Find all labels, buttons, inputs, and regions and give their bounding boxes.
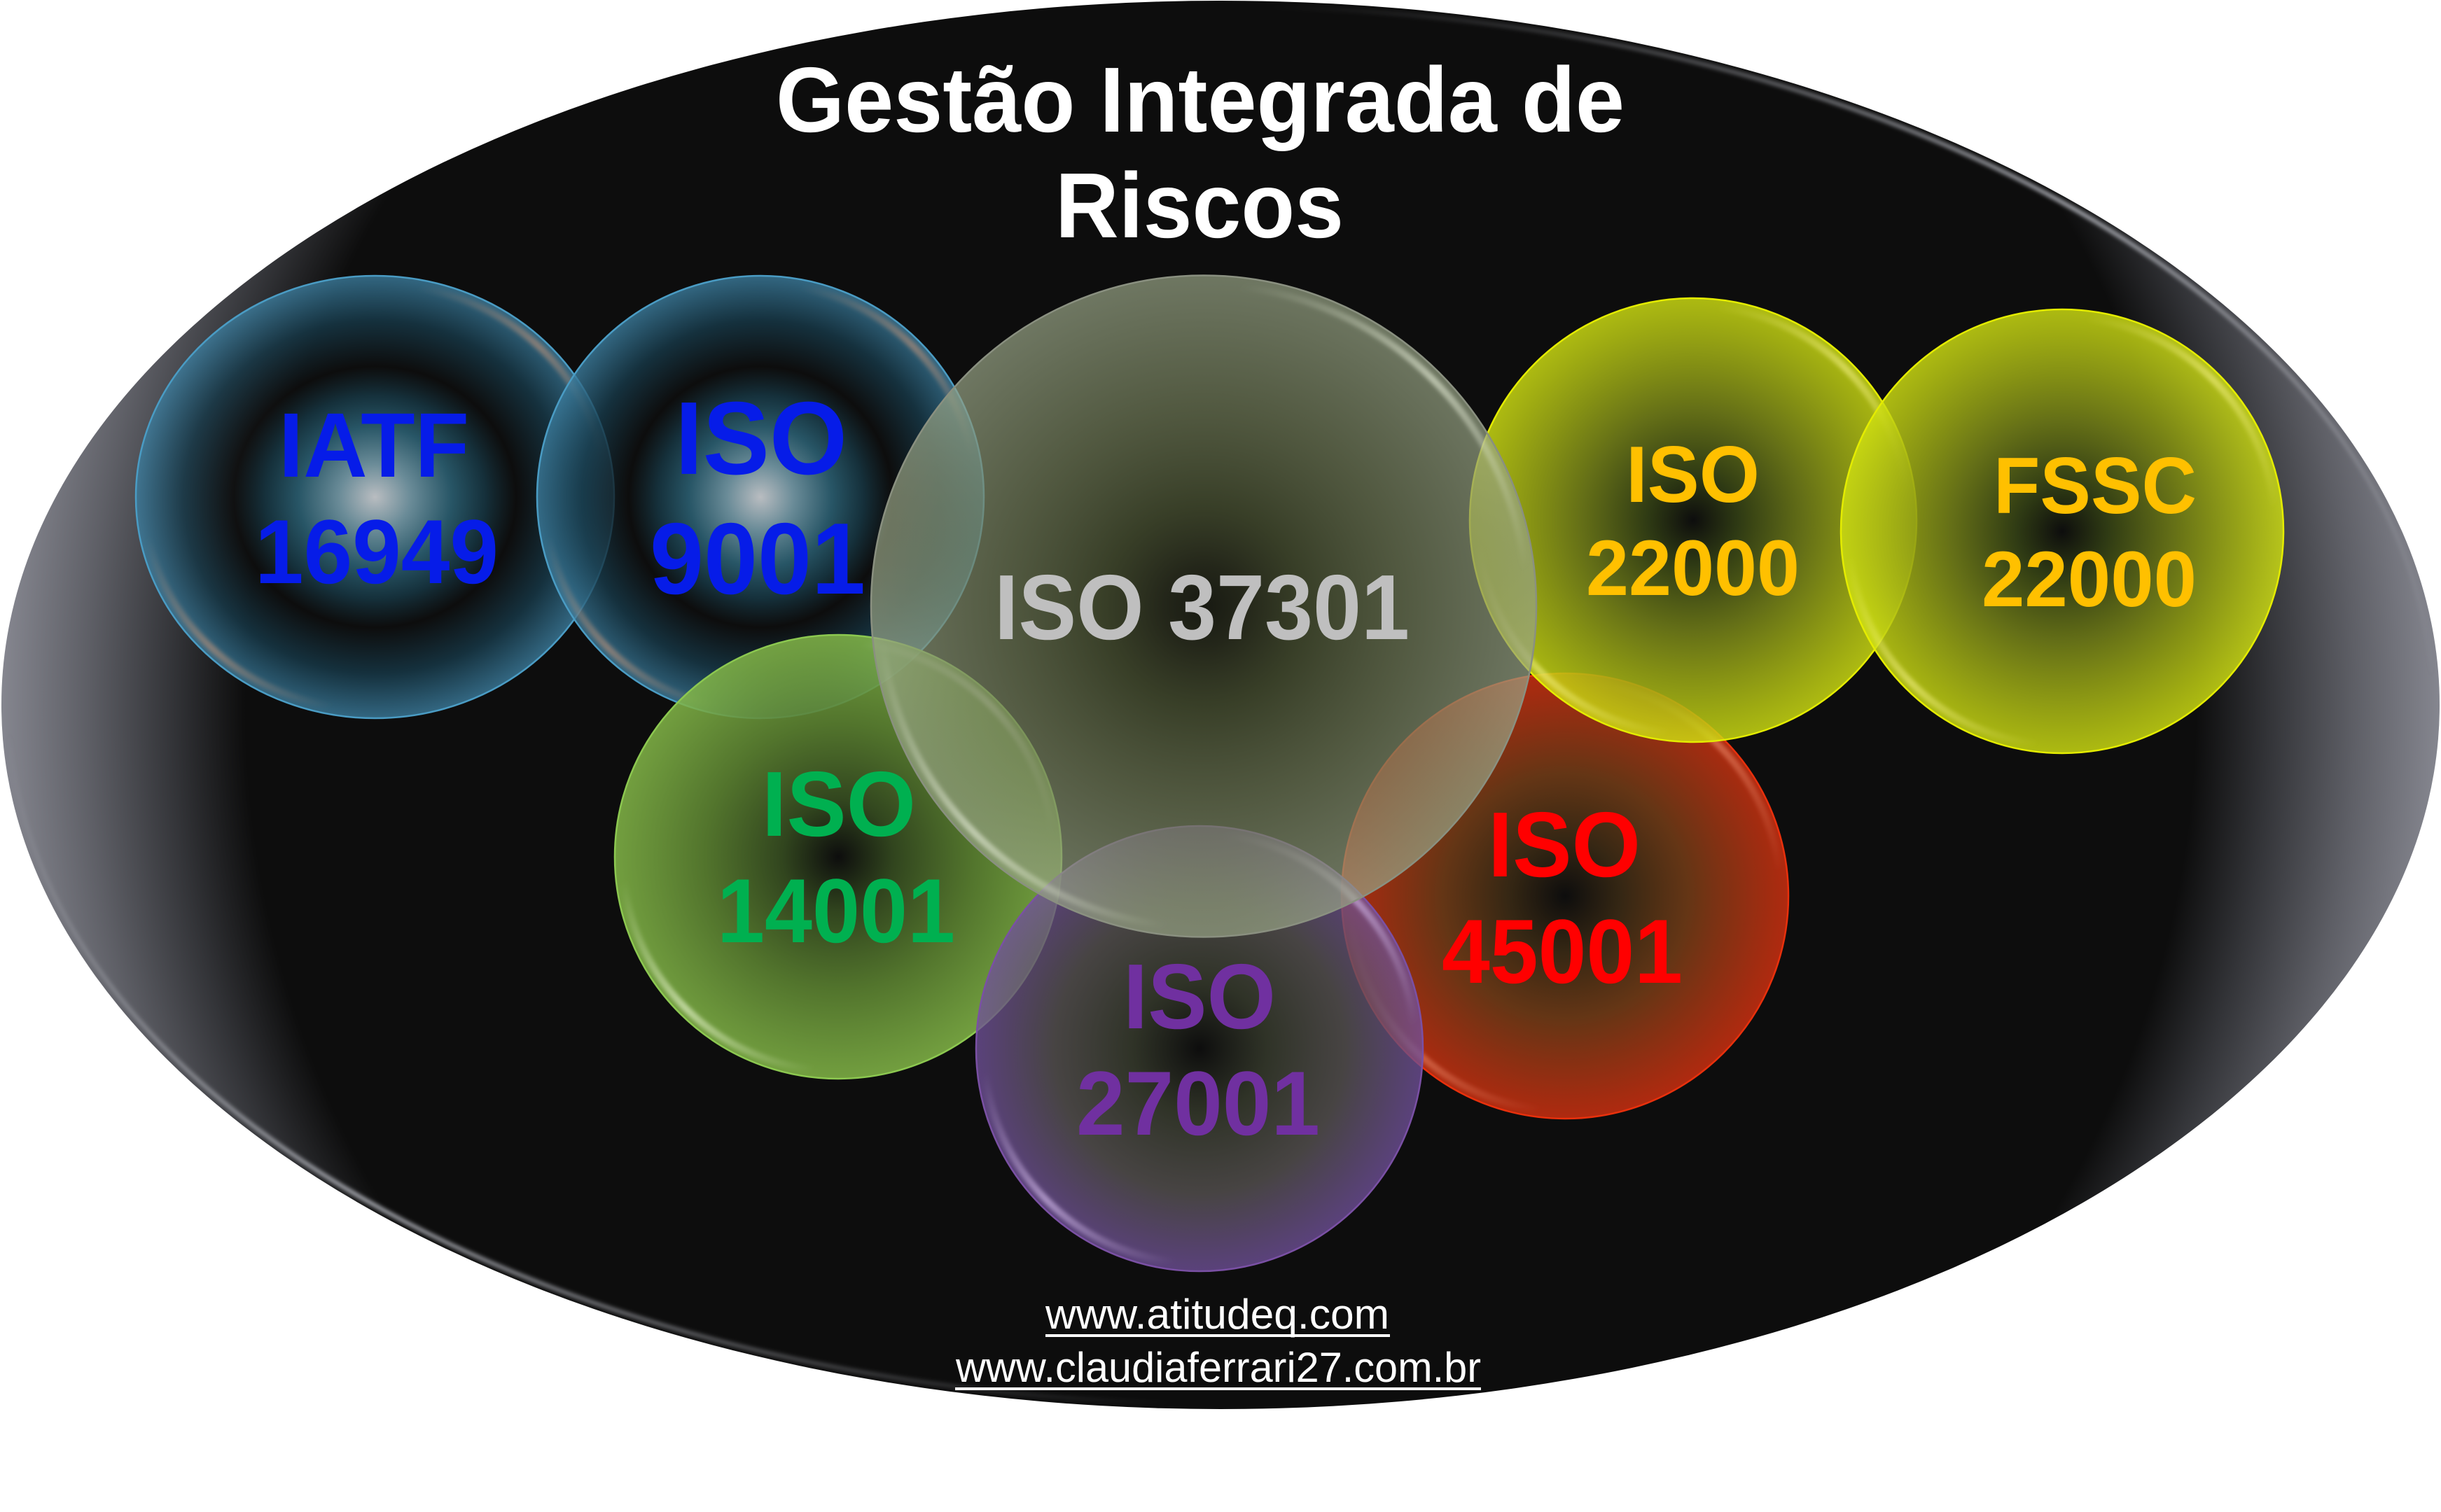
circle: ISO 45001	[1342, 673, 1788, 1119]
circle: ISO 22000: 22000	[1586, 524, 1800, 612]
website links: www.atitudeq.com	[1045, 1291, 1389, 1338]
circle: ISO 45001: 45001	[1442, 900, 1683, 1002]
circle: IATF 16949: 16949	[255, 500, 499, 603]
website links: www.claudiaferrari27.com.br	[955, 1344, 1481, 1391]
title	[776, 48, 1625, 257]
title: Gestão Integrada de	[776, 48, 1625, 151]
circle: FSSC 22000: FSSC	[1994, 442, 2197, 531]
circle: ISO 9001	[537, 276, 984, 718]
circle: ISO 9001: ISO	[675, 381, 847, 496]
circle: ISO 22000: ISO	[1626, 430, 1760, 519]
circle: ISO 37301: ISO 37301	[994, 556, 1410, 659]
circle: FSSC 22000: 22000	[1982, 536, 2197, 623]
circle: IATF 16949	[136, 276, 614, 718]
circle: ISO 37301	[871, 276, 1536, 937]
circle: ISO 14001: 14001	[717, 860, 955, 962]
circle: ISO 27001: ISO	[1123, 945, 1276, 1048]
circle: ISO 27001: 27001	[1076, 1052, 1320, 1154]
circle: ISO 9001: 9001	[650, 502, 865, 615]
website links	[955, 1291, 1481, 1391]
circle: ISO 14001	[615, 635, 1062, 1079]
title: Riscos	[1055, 154, 1344, 257]
circle: FSSC 22000	[1841, 309, 2283, 753]
circle: ISO 27001	[976, 826, 1423, 1271]
circle: ISO 22000	[1470, 298, 1917, 742]
circle: ISO 14001: ISO	[762, 752, 916, 855]
circle: IATF 16949: IATF	[279, 393, 469, 496]
circle: ISO 45001: ISO	[1488, 793, 1641, 896]
